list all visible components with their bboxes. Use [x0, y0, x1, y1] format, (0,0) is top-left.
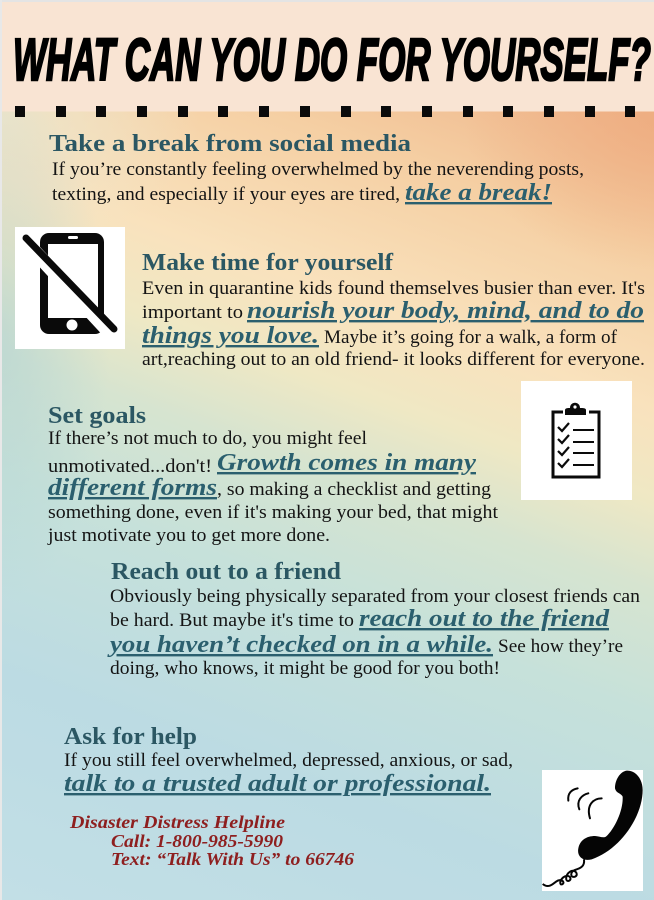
- text block: reach out: doing, who knows, it might be good for you both!: [110, 658, 500, 679]
- text block: ask for help: talk to a trusted adult or professional.: [64, 771, 491, 797]
- panel: make time for yourself: [142, 249, 645, 370]
- text block: set goals: If there’s not much to do, you might feel: [48, 428, 367, 449]
- text block: take a break: [52, 159, 584, 206]
- text block: make time: Even in quarantine kids found themselves busier than ever. It's: [142, 278, 645, 299]
- heading: ask for help: Ask for help: [64, 723, 197, 750]
- text block: make time: art,reaching out to an old friend- it looks different for everyone.: [142, 349, 645, 370]
- text block: take a break: If you’re constantly feeling overwhelmed by the neverending posts,: [52, 159, 584, 180]
- text block: set goals: [47, 428, 499, 546]
- icon: ringing telephone: [542, 770, 643, 891]
- text block: set goals: something done, even if it's making your bed, that might: [48, 502, 499, 523]
- heading: take a break: Take a break from social media: [49, 130, 411, 157]
- text block: ask for help: [64, 750, 513, 797]
- text block: make time: [142, 278, 645, 370]
- text block: set goals: just motivate you to get more done.: [47, 525, 330, 546]
- text block: reach out: reach out to the friend: [359, 606, 610, 632]
- text block: reach out: Obviously being physically separated from your closest friends can: [110, 586, 641, 607]
- dotted divider: [15, 106, 635, 117]
- text block: set goals: different forms: [48, 475, 217, 501]
- text block: take a break: texting, and especially if your eyes are tired,: [52, 184, 400, 205]
- icon: clipboard checklist: [521, 381, 632, 500]
- text block: make time: nourish your body, mind, and to do: [247, 298, 644, 324]
- text block: set goals: unmotivated...don't!: [48, 456, 212, 477]
- text block: reach out: See how they’re: [498, 636, 623, 657]
- panel: ask for help: [64, 723, 513, 869]
- heading: set goals: Set goals: [48, 402, 146, 429]
- text block: reach out: [107, 586, 641, 679]
- heading: reach out: Reach out to a friend: [111, 558, 341, 585]
- callout: helpline: [69, 812, 354, 869]
- text block: set goals: , so making a checklist and getting: [217, 479, 492, 500]
- icon: crossed-out phone: [15, 227, 125, 349]
- text block: make time: things you love.: [142, 323, 319, 349]
- text block: reach out: be hard. But maybe it's time to: [110, 610, 354, 631]
- text block: make time: Maybe it’s going for a walk, a form of: [324, 327, 618, 348]
- text block: reach out: you haven’t checked on in a while.: [107, 632, 493, 658]
- text block: take a break: take a break!: [405, 180, 552, 206]
- callout: helpline: Text: “Talk With Us” to 66746: [111, 849, 354, 869]
- text block: ask for help: If you still feel overwhelmed, depressed, anxious, or sad,: [64, 750, 513, 771]
- callout: helpline: Call: 1-800-985-5990: [111, 831, 283, 851]
- panel: reach out to a friend: [107, 558, 641, 679]
- text block: set goals: Growth comes in many: [217, 450, 476, 476]
- heading: make time: Make time for yourself: [142, 249, 394, 276]
- text block: make time: important to: [142, 302, 243, 323]
- panel: set goals: [47, 402, 499, 546]
- callout: helpline: Disaster Distress Helpline: [69, 812, 285, 832]
- panel: take a break from social media: [49, 130, 584, 206]
